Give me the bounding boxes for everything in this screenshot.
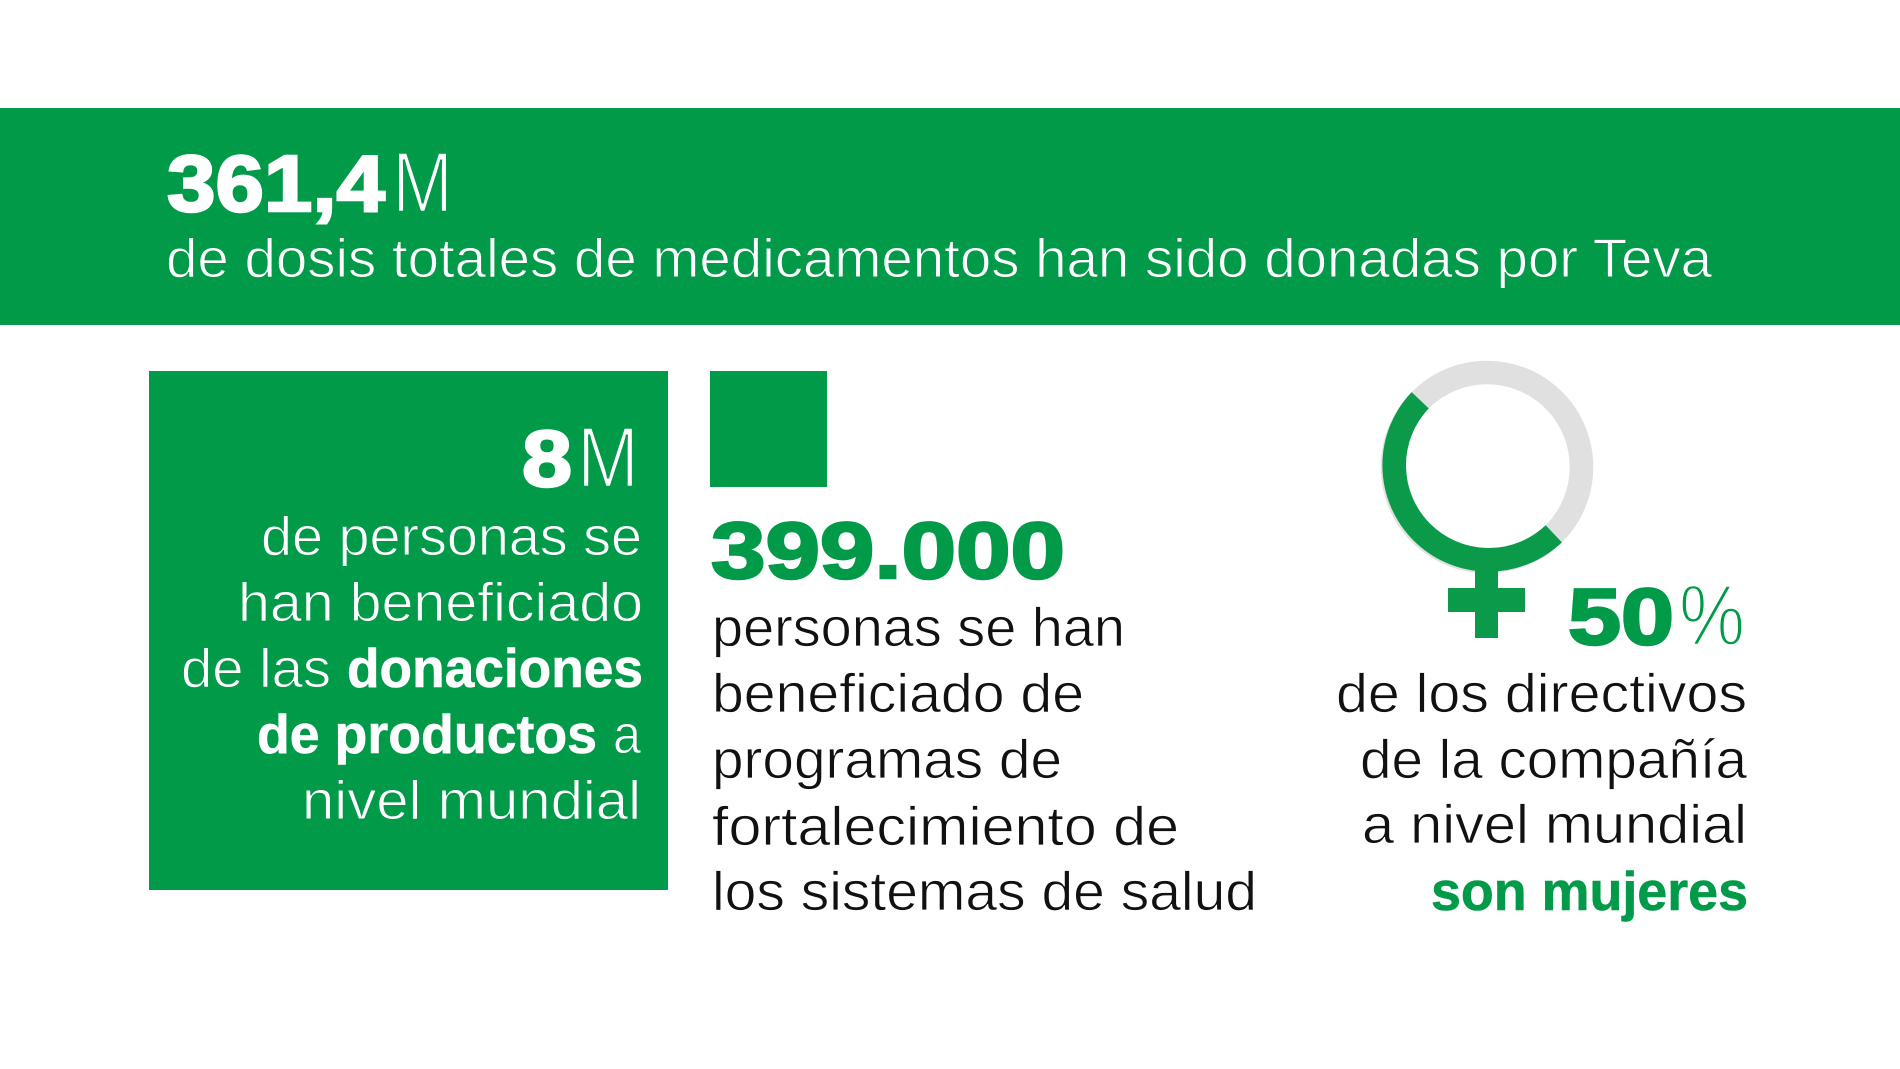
headline number: 361,4M: 361,4 bbox=[167, 139, 386, 228]
text block: programs description: personas se han bbox=[712, 596, 1125, 658]
text block: directors description: de la compañía bbox=[1360, 728, 1747, 790]
headline number: 50% bbox=[1568, 568, 1745, 664]
icon: female symbol donut chart bbox=[1392, 372, 1582, 638]
text block: programs description: beneficiado de bbox=[712, 662, 1084, 724]
text block: donations description bbox=[181, 505, 643, 831]
icon: green square bbox=[710, 371, 827, 487]
panel: top banner total doses bbox=[0, 108, 1900, 325]
text block: donations description: a bbox=[613, 703, 641, 765]
headline number: 50%: 50 bbox=[1568, 572, 1674, 661]
text block: programs description bbox=[712, 596, 1257, 922]
headline number: 8M bbox=[522, 410, 639, 506]
text block: donations description: de las bbox=[181, 637, 331, 699]
text block: donations description: donaciones bbox=[347, 637, 643, 699]
text block: programs description: fortalecimiento de bbox=[712, 795, 1179, 857]
text block: programs description: los sistemas de salud bbox=[712, 860, 1257, 922]
text block: donations description: nivel mundial bbox=[302, 769, 641, 831]
headline number: 399.000: 399.000 bbox=[711, 506, 1065, 595]
headline number: 50%: % bbox=[1679, 568, 1745, 664]
headline number: 361,4M bbox=[167, 135, 453, 231]
headline number: 8M: M bbox=[577, 410, 639, 506]
text block: donations description: han beneficiado bbox=[238, 571, 643, 633]
text block: programs description: programas de bbox=[712, 728, 1062, 790]
panel: 8M people benefited from product donations bbox=[149, 371, 668, 890]
text block: directors description: de los directivos bbox=[1336, 662, 1747, 724]
text block: donations description: de productos bbox=[257, 703, 597, 765]
panel: 50% of directors are women bbox=[1336, 372, 1748, 922]
headline number: 361,4M: M bbox=[392, 135, 453, 231]
text block: directors description bbox=[1336, 662, 1748, 922]
text block: donations description: de personas se bbox=[261, 505, 642, 567]
text block: directors description: a nivel mundial bbox=[1362, 793, 1747, 855]
headline number: 8M: 8 bbox=[522, 414, 572, 503]
panel: 399.000 people benefited from health system programs bbox=[710, 371, 1257, 922]
text block: directors description: son mujeres bbox=[1431, 860, 1748, 922]
banner description text: de dosis totales de medicamentos han sido donadas por Teva bbox=[166, 227, 1712, 289]
